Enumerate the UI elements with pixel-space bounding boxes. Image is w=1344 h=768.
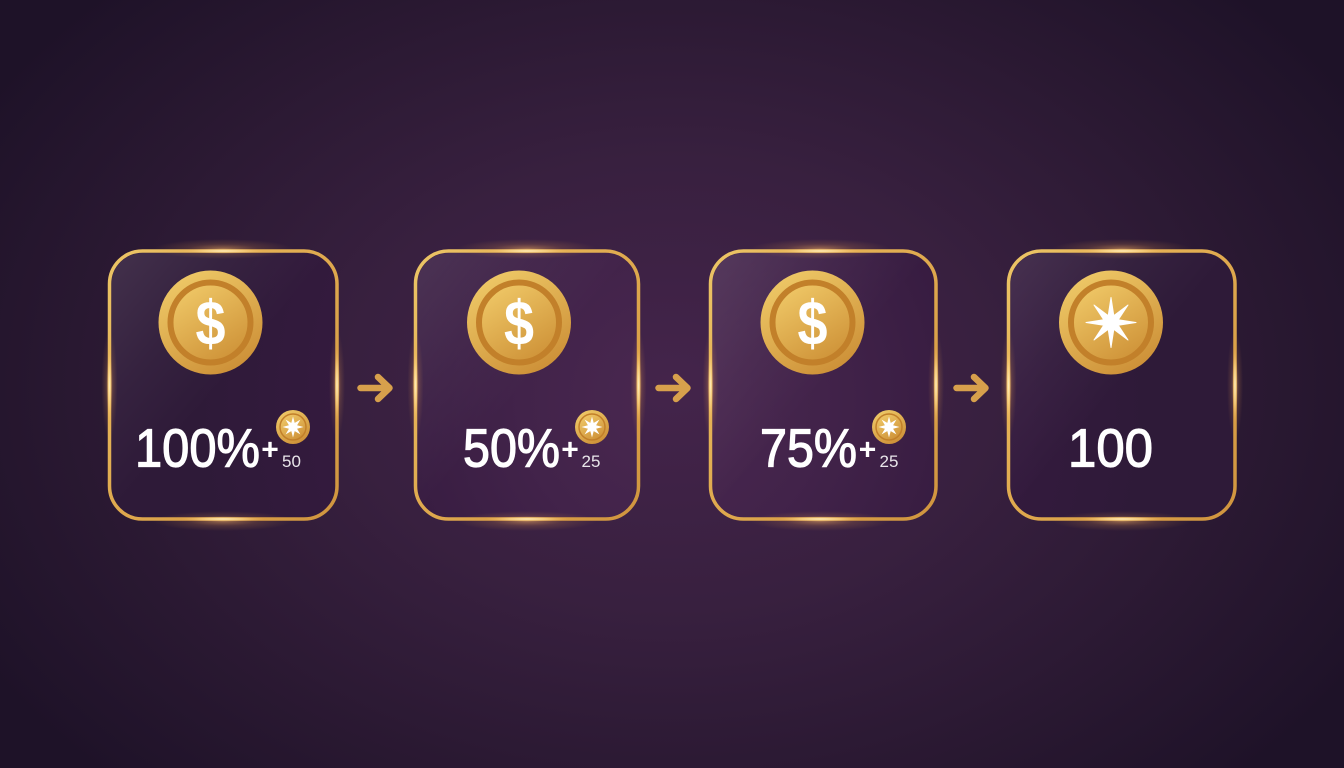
bonus: 25: 25: [582, 452, 600, 471]
icon: dollar coin: [158, 270, 262, 374]
icon: small star coin: [575, 410, 609, 444]
icon: star coin: [1059, 270, 1163, 374]
arrow 2: [658, 377, 688, 399]
icon: small star coin: [872, 410, 906, 444]
card 3 edge glows: [702, 239, 944, 531]
plus sign: +: [261, 434, 279, 466]
card 4 edge glows: [1000, 239, 1243, 531]
icon: small star coin: [276, 410, 310, 444]
icon: dollar coin: [467, 270, 571, 374]
value: 50%: 50%: [463, 418, 560, 478]
value: 100%: 100%: [135, 418, 260, 478]
icon: dollar coin: [760, 270, 864, 374]
value: 100: 100: [1068, 418, 1153, 478]
bonus: 50: 50: [282, 452, 301, 471]
icon: dollar coin: $: [504, 289, 534, 359]
value: 75%: 75%: [760, 418, 857, 478]
arrow 1: [360, 377, 390, 399]
bonus: 25: 25: [880, 452, 898, 471]
plus sign: +: [561, 434, 579, 466]
plus sign: +: [859, 434, 876, 466]
card 1 frame: [110, 251, 337, 519]
arrow 3: [956, 377, 986, 399]
card 3 frame: [710, 251, 936, 519]
card 4 frame: [1008, 251, 1235, 519]
icon: dollar coin: $: [798, 289, 828, 359]
card 2 edge glows: [408, 239, 646, 531]
card 2 frame: [416, 251, 638, 519]
panel: card 3, 75% plus 25: [702, 239, 944, 531]
panel: card 2, 50% plus 25: [408, 239, 646, 531]
panel: card 1, 100% plus 50: [102, 239, 345, 531]
panel: card 4, 100: [1000, 239, 1243, 531]
icon: dollar coin: $: [196, 289, 226, 359]
card 1 edge glows: [102, 239, 345, 531]
